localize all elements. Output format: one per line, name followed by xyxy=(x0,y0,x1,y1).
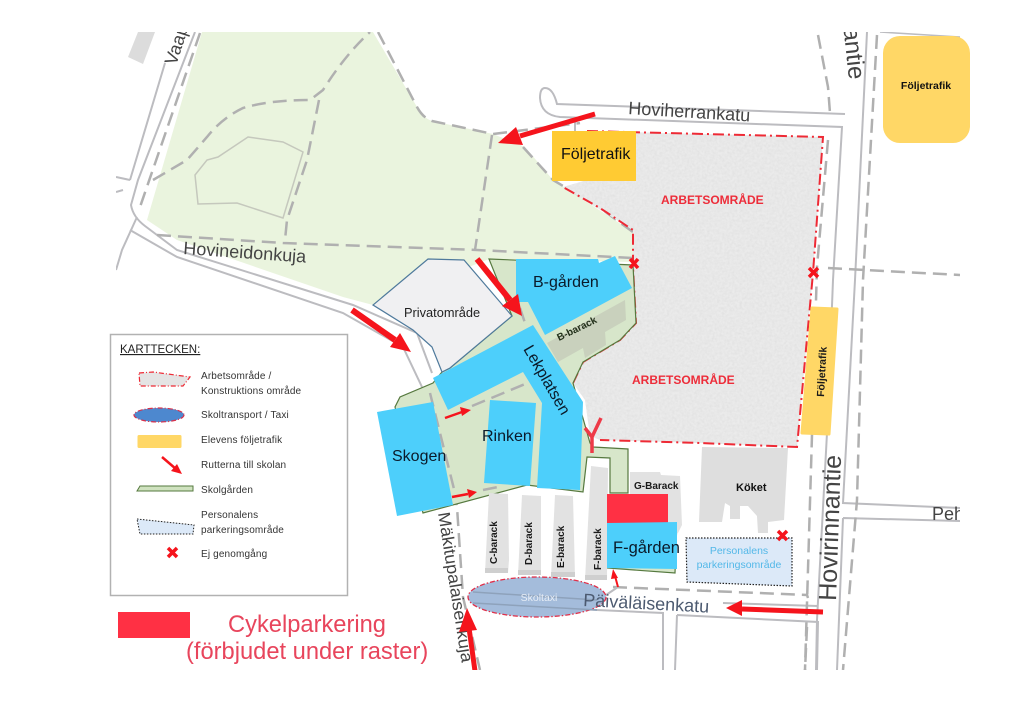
escort traffic box: top right xyxy=(883,36,970,143)
arrow: Hoviherrankatu xyxy=(498,114,595,145)
legend: staff parking: Personalens xyxy=(201,510,258,521)
legend: no passage xyxy=(168,548,267,560)
no passage markers xyxy=(630,259,818,540)
building: top left xyxy=(128,32,155,64)
legend: work area xyxy=(139,370,302,397)
arrow: to B-gården xyxy=(477,259,522,316)
parking area: parkeringsområde xyxy=(697,559,781,571)
building: B-barack xyxy=(547,300,626,362)
street label: Hovirinnantie: Hovirinnantie xyxy=(814,454,847,601)
arrow: Mäkitupalaisenkuja xyxy=(459,608,477,671)
label: ARBETSOMRÅDE south: ARBETSOMRÅDE xyxy=(632,372,735,387)
building: E-barack xyxy=(551,495,575,577)
building: G-barack xyxy=(630,472,682,533)
legend: staff parking xyxy=(137,510,284,536)
street label: Hovineidonkuja: Hovineidonkuja xyxy=(183,238,308,267)
följetrafik box: top: Följetrafik xyxy=(561,146,631,163)
zone: Rinken: Rinken xyxy=(482,428,532,445)
zone: F-gården: F-gården xyxy=(613,539,680,557)
följetrafik box: roadside xyxy=(802,308,837,434)
zone: F-gården xyxy=(607,522,680,569)
school taxi xyxy=(468,577,606,617)
legend: work area: Arbetsområde / xyxy=(201,370,272,382)
area: cycle parking xyxy=(607,494,668,523)
zone: B-gården: B-gården xyxy=(533,273,599,291)
building: B-barack: B-barack xyxy=(555,315,599,344)
cycle parking note: Cykelparkering xyxy=(228,612,386,638)
building: Köket: Köket xyxy=(736,482,767,494)
park area xyxy=(147,32,633,305)
legend: schoolyard: Skolgården xyxy=(201,484,253,496)
building: D-barack: D-barack xyxy=(524,522,535,565)
arrow: Päiväläisenkatu xyxy=(726,600,823,616)
parking area xyxy=(686,538,792,586)
schoolyard south yard xyxy=(607,533,678,574)
zone: Skogen xyxy=(377,402,453,516)
följetrafik box: roadside: Följetrafik xyxy=(815,346,830,397)
schoolyard xyxy=(395,259,636,513)
legend: no passage: Ej genomgång xyxy=(201,548,267,560)
street label: Mäkitupalaisenkuja: Mäkitupalaisenkuja xyxy=(434,511,477,664)
arrow: Hovineidonkuja xyxy=(352,310,411,352)
building: C-barack: C-barack xyxy=(489,521,500,564)
cycle parking note: (förbjudet under raster) xyxy=(186,639,428,665)
zone: Lekplatsen xyxy=(433,325,583,490)
legend: routes xyxy=(162,457,286,474)
legend: escort traffic xyxy=(138,435,283,448)
building: C-barack xyxy=(485,493,509,573)
base map xyxy=(116,13,964,671)
closed gate marking xyxy=(585,418,601,453)
street label: Vaapukka: Vaapu xyxy=(161,13,195,67)
legend: staff parking: parkeringsområde xyxy=(201,524,284,536)
legend: school transport: Skoltransport / Taxi xyxy=(201,410,289,421)
cycle parking note xyxy=(186,612,428,665)
cycle parking swatch xyxy=(118,612,190,638)
legend panel xyxy=(110,334,348,596)
label: Privatområde: Privatområde xyxy=(404,305,480,320)
schoolyard paths xyxy=(430,308,530,493)
parking area: Personalens xyxy=(710,545,768,557)
building: Köket xyxy=(699,447,788,533)
private area xyxy=(373,259,512,372)
building: F-barack: F-barack xyxy=(593,528,604,570)
följetrafik box: top xyxy=(552,131,636,181)
road network xyxy=(116,32,960,670)
zone: Lekplatsen: Lekplatsen xyxy=(520,342,573,418)
legend title: KARTTECKEN: xyxy=(120,344,200,356)
work area border xyxy=(563,131,823,447)
building: D-barack xyxy=(518,495,541,575)
street label: antie: antie xyxy=(838,26,870,81)
legend: schoolyard xyxy=(137,484,253,496)
street label: Hoviherrankatu: Hoviherrankatu xyxy=(628,98,751,125)
zone: Skogen: Skogen xyxy=(392,448,446,465)
arrow: to F-gården xyxy=(611,569,618,587)
label: ARBETSOMRÅDE north: ARBETSOMRÅDE xyxy=(661,192,764,207)
legend: work area: Konstruktions område xyxy=(201,385,302,397)
escort traffic box: top right: Följetrafik xyxy=(901,80,951,92)
school taxi: Skoltaxi xyxy=(521,592,557,604)
street label: Päiväläisenkatu: Päiväläisenkatu xyxy=(583,590,710,617)
building: G-barack: G-Barack xyxy=(634,481,679,492)
street label: Peh: Peh xyxy=(932,504,964,524)
legend: school transport xyxy=(134,408,289,422)
legend: escort traffic: Elevens följetrafik xyxy=(201,435,283,446)
park paths xyxy=(153,32,633,258)
arrow: small schoolyard south xyxy=(452,489,477,498)
building: E-barack: E-barack xyxy=(556,525,567,568)
work area xyxy=(563,131,823,447)
zone: Rinken xyxy=(482,400,536,486)
arrow: small schoolyard north xyxy=(445,407,471,418)
zone: B-gården xyxy=(516,256,632,335)
legend: routes: Rutterna till skolan xyxy=(201,460,286,471)
building: F-barack xyxy=(585,466,608,580)
